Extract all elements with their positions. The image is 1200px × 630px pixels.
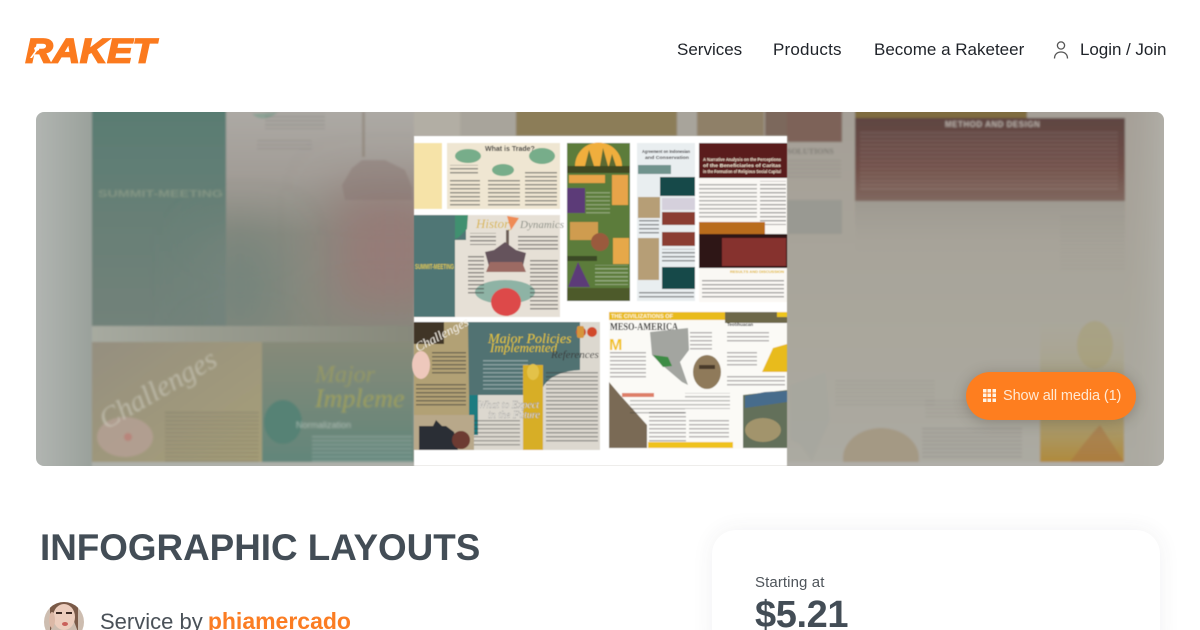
blurred backdrop: Impleme bbox=[314, 384, 405, 413]
thumbnail: What is Trade: What is Trade? bbox=[485, 146, 535, 153]
thumbnail: narrative analysis poster: RESULTS AND DISCUSSION bbox=[730, 269, 784, 274]
icon: grid bbox=[983, 389, 996, 402]
blurred backdrop: Challenges bbox=[94, 343, 223, 436]
thumbnail: Major Policies Implemented: in the Future bbox=[488, 410, 540, 421]
top edge strips bbox=[414, 102, 787, 136]
thumbnail: Major Policies Implemented: Major Policies bbox=[487, 332, 572, 347]
seller line bbox=[44, 602, 351, 630]
logo: RAKET: RAKET bbox=[26, 32, 159, 70]
central collage image bbox=[412, 136, 787, 466]
blurred backdrop: METHOD AND DESIGN bbox=[945, 120, 1040, 129]
thumbnail: conservation poster: Agreement on Indonesian bbox=[642, 149, 690, 154]
blurred backdrop bbox=[26, 102, 1174, 488]
thumbnail: What is Trade bbox=[447, 143, 560, 209]
nav link: Become a Raketeer: Become a Raketeer bbox=[874, 40, 1024, 59]
thumbnail: Major Policies Implemented: Implemented bbox=[489, 340, 558, 355]
thumbnail: Meso-America: THE CIVILIZATIONS OF bbox=[611, 314, 673, 320]
thumbnail: pale yellow block bbox=[414, 143, 442, 209]
blurred backdrop: SOLUTIONS bbox=[787, 147, 834, 156]
blurred backdrop: SUMMIT-MEETING bbox=[98, 189, 223, 200]
thumbnail: narrative analysis poster: in the Formation of Religious Social Capital bbox=[703, 169, 781, 174]
thumbnail: History Dynamics bbox=[414, 215, 564, 317]
thumbnail: green poster bbox=[567, 142, 630, 301]
thumbnail: Major Policies Implemented: Challenges bbox=[412, 314, 471, 355]
thumbnail: History Dynamics: SUMMIT-MEETING bbox=[415, 264, 454, 271]
thumbnail: Meso-America: M bbox=[609, 337, 622, 354]
pricing card bbox=[712, 530, 1160, 630]
nav link: Products: Products bbox=[773, 40, 842, 59]
icon: user bbox=[1054, 41, 1068, 58]
thumbnail: conservation poster: and Conservation bbox=[645, 155, 689, 160]
heading: service title: INFOGRAPHIC LAYOUTS bbox=[40, 527, 480, 568]
nav link: Services: Services bbox=[677, 40, 742, 59]
blurred backdrop: Normalization bbox=[296, 420, 351, 430]
thumbnail: Meso-America: MESO-AMERICA bbox=[610, 322, 678, 333]
thumbnail: narrative analysis poster: A Narrative Analysis on the Perceptions bbox=[703, 157, 782, 162]
button label: Show all media (1) bbox=[1003, 388, 1121, 404]
nav link: Login / Join: Login / Join bbox=[1080, 40, 1166, 59]
thumbnail: Meso-America bbox=[609, 312, 787, 449]
right side bbox=[787, 102, 1174, 476]
thumbnail: Major Policies Implemented: References bbox=[550, 349, 599, 361]
avatar bbox=[44, 602, 84, 630]
hero media gallery bbox=[36, 112, 1164, 466]
thumbnail: Major Policies Implemented: What to Expect bbox=[478, 400, 539, 411]
thumbnail: History Dynamics: Dynamics bbox=[519, 219, 564, 231]
thumbnail: narrative analysis poster bbox=[699, 143, 787, 302]
thumbnail: Meso-America: Teotihuacan bbox=[727, 322, 753, 327]
thumbnail: History Dynamics: History bbox=[475, 216, 515, 231]
label: starting at: Starting at bbox=[755, 574, 824, 591]
button: Show all media bbox=[966, 372, 1136, 420]
thumbnail: Major Policies Implemented bbox=[412, 314, 600, 450]
blurred backdrop: Major bbox=[314, 362, 376, 388]
thumbnail: conservation poster bbox=[637, 143, 695, 301]
thumbnail: narrative analysis poster: of the Beneficiaries of Caritas bbox=[703, 163, 782, 168]
